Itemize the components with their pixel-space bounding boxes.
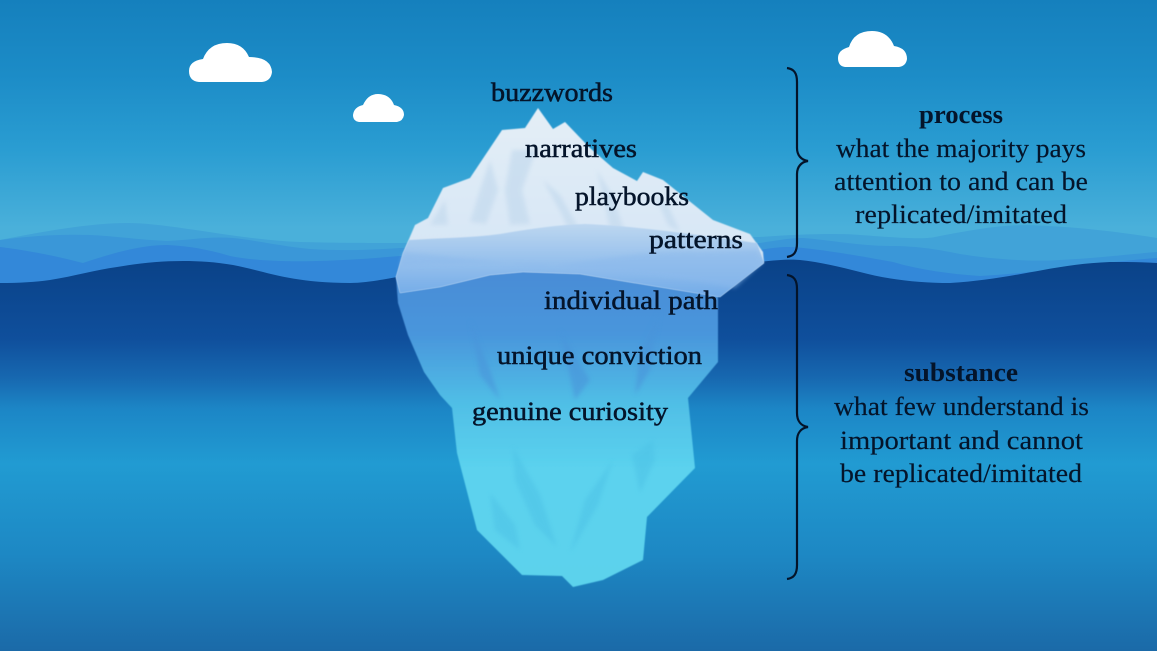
text block: substance: be replicated/imitated — [840, 459, 1082, 488]
labels below water — [472, 286, 718, 426]
label: buzzwords: buzzwords — [491, 78, 613, 107]
label: genuine curiosity: genuine curiosity — [472, 397, 668, 426]
label: patterns: patterns — [649, 225, 743, 254]
cloud left — [189, 43, 272, 82]
deep ice streaks — [490, 440, 655, 553]
labels above water — [491, 78, 743, 254]
ice streaks — [430, 150, 680, 240]
iceberg — [396, 108, 764, 587]
heading: substance: substance — [904, 358, 1018, 387]
brace: substance — [787, 275, 808, 579]
iceberg underwater body — [396, 240, 763, 587]
iceberg tip above water — [396, 108, 764, 297]
text block: process: what the majority pays — [836, 134, 1086, 163]
heading: process: process — [919, 100, 1003, 129]
brace: process — [787, 68, 808, 257]
text block: substance: what few understand is — [834, 392, 1089, 421]
mid band facets — [400, 250, 763, 288]
text block: process: attention to and can be — [834, 167, 1088, 196]
label: unique conviction: unique conviction — [497, 341, 702, 370]
label: individual path: individual path — [544, 286, 718, 315]
translucent waterline band — [396, 224, 764, 297]
label: playbooks: playbooks — [575, 182, 689, 211]
text block: process: replicated/imitated — [855, 200, 1067, 229]
text block: substance — [834, 358, 1089, 488]
label: narratives: narratives — [525, 134, 637, 163]
upper underwater streaks — [470, 310, 660, 400]
sky background — [0, 0, 1157, 300]
sea — [0, 260, 1157, 651]
text block: substance: important and cannot — [840, 426, 1084, 455]
back wave layers — [0, 223, 1157, 300]
cloud small — [353, 94, 404, 122]
cloud right — [838, 31, 907, 67]
text block: process — [834, 100, 1088, 229]
